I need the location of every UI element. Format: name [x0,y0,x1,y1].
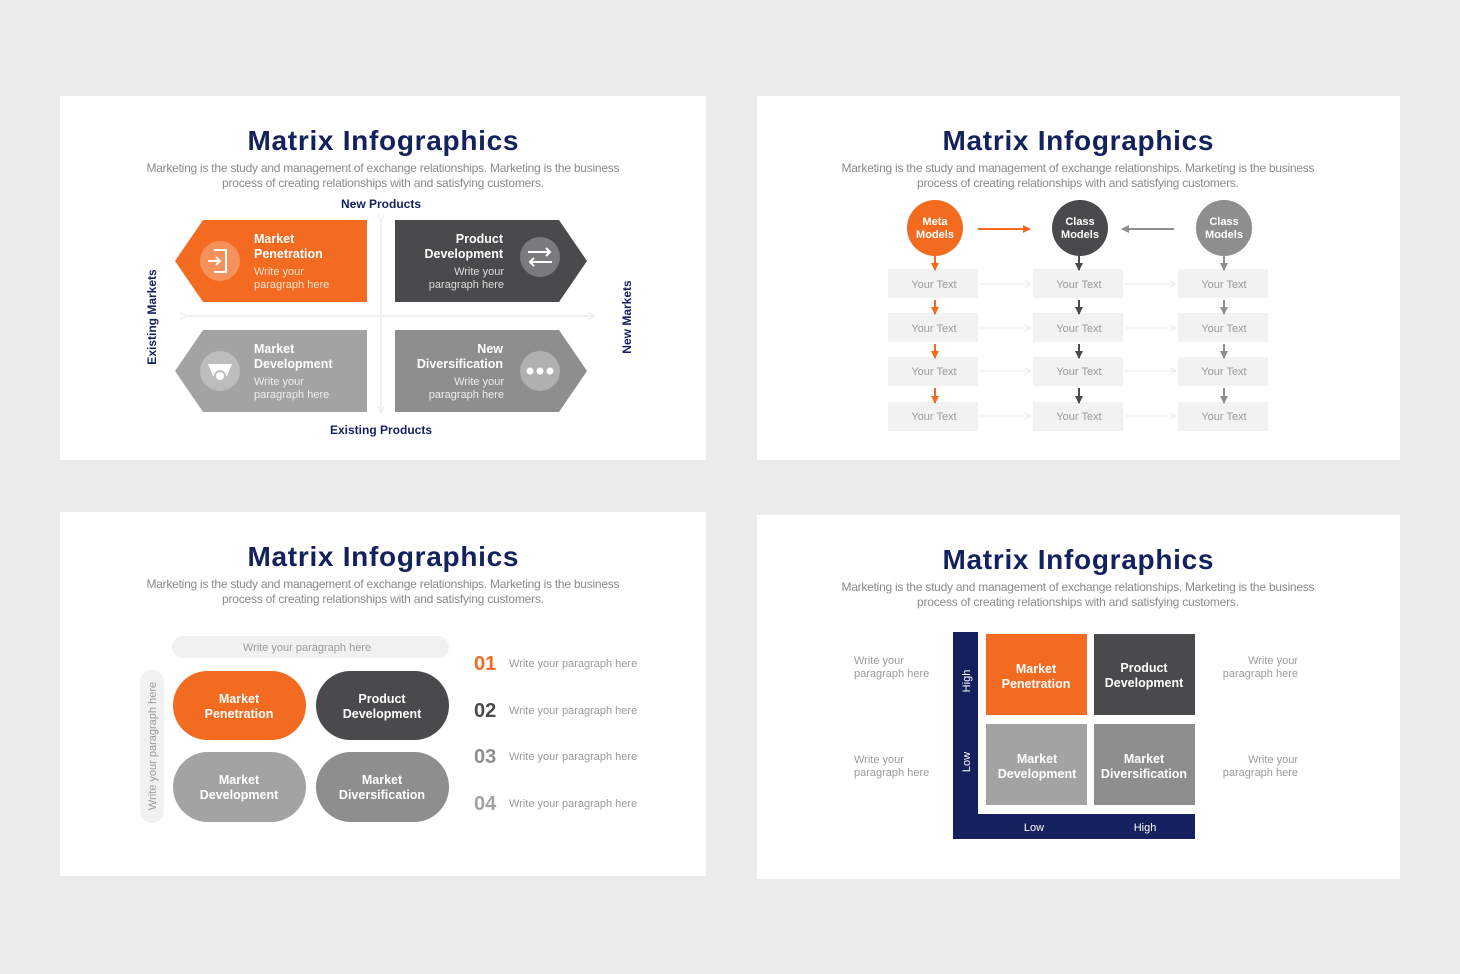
text boxes grid: Your Text [1201,279,1247,291]
card: product development: Product [456,232,504,246]
numbered list: 04 [474,793,497,815]
numbered list: 01 [474,653,496,675]
axis frame: High [961,670,973,692]
card: new diversification: paragraph here [429,389,504,401]
circle: meta models [907,200,963,256]
numbered list: Write your paragraph here [509,705,637,717]
numbered list [474,653,637,815]
pill: market penetration: Market [219,692,260,706]
circle: class models dark [1052,200,1108,256]
text boxes grid: Your Text [911,411,957,423]
card: new diversification: New [477,342,503,356]
side notes: Write your [1248,655,1298,667]
card: market penetration: Write your [254,266,304,278]
box: product development: Development [1105,676,1184,690]
subtitle [146,577,620,606]
subtitle: Marketing is the study and management of exchange relationships. Marketing is the business [146,577,620,591]
panel: model flow [757,96,1400,460]
side notes: paragraph here [854,668,929,680]
subtitle: process of creating relationships with and satisfying customers. [917,176,1239,190]
pill: market diversification: Market [362,773,403,787]
pill: market penetration: Penetration [205,707,273,721]
text boxes grid: Your Text [911,323,957,335]
subtitle: Marketing is the study and management of exchange relationships. Marketing is the business [146,161,620,175]
numbered list: Write your paragraph here [509,658,637,670]
card: product development: Write your [454,266,504,278]
subtitle: process of creating relationships with and satisfying customers. [222,176,544,190]
pill: market penetration [173,671,306,740]
subtitle [146,161,620,190]
side pill label: Write your paragraph here [147,682,159,810]
panel: square matrix [757,515,1400,879]
text boxes grid: Your Text [1056,366,1102,378]
circle: class models gray: Models [1205,229,1243,241]
pill: market development: Development [200,788,279,802]
card: new diversification: Diversification [417,357,503,371]
pill: market development: Market [219,773,260,787]
box: product development [1094,634,1195,715]
card: market penetration: Penetration [254,247,323,261]
pill: market diversification [316,752,449,822]
axis frame [953,632,1195,839]
axis label: existing markets: Existing Markets [145,269,159,365]
box: market penetration: Market [1016,662,1057,676]
text boxes grid: Your Text [911,366,957,378]
text boxes grid: Your Text [1201,411,1247,423]
card: product development [395,220,587,302]
pill: market development [173,752,306,822]
top pill label: Write your paragraph here [243,642,371,654]
text boxes grid: Your Text [1056,323,1102,335]
numbered list: Write your paragraph here [509,751,637,763]
side notes: Write your [1248,754,1298,766]
subtitle: Marketing is the study and management of exchange relationships. Marketing is the business [842,161,1314,175]
pill: product development [316,671,449,740]
panel: ansoff arrows [60,96,706,460]
subtitle: Marketing is the study and management of exchange relationships. Marketing is the business [842,580,1314,594]
title: Matrix Infographics [248,541,518,572]
title: Matrix Infographics [248,125,518,156]
card: new diversification [395,330,587,412]
side notes: Write your [854,655,904,667]
card: new diversification: Write your [454,376,504,388]
pill: market diversification: Diversification [339,788,425,802]
box: market diversification: Diversification [1101,767,1187,781]
card: market development: paragraph here [254,389,329,401]
box: market penetration: Penetration [1002,677,1070,691]
box: market diversification [1094,724,1195,805]
top pill label [172,636,449,658]
text boxes grid: Your Text [1201,366,1247,378]
card: market development: Market [254,342,295,356]
box: market development: Development [998,767,1077,781]
box: market diversification: Market [1124,752,1165,766]
subtitle: process of creating relationships with and satisfying customers. [222,592,544,606]
subtitle: process of creating relationships with and satisfying customers. [917,595,1239,609]
card: market development: Write your [254,376,304,388]
card: market development [175,330,367,412]
side notes: paragraph here [854,767,929,779]
axis frame: Low [1024,822,1044,834]
axis frame: High [1134,822,1156,834]
axis frame: Low [961,752,973,772]
panel: pill matrix [60,512,706,876]
axes [186,220,594,412]
card: market penetration: Market [254,232,295,246]
text boxes grid: Your Text [911,279,957,291]
pill: product development: Development [343,707,422,721]
card: market penetration [175,220,367,302]
circle: class models dark: Models [1061,229,1099,241]
box: market penetration [986,634,1087,715]
pill: product development: Product [358,692,406,706]
numbered list: Write your paragraph here [509,798,637,810]
subtitle [842,161,1314,190]
side pill label [140,670,164,823]
side notes: Write your [854,754,904,766]
axis label: existing products: Existing Products [330,423,432,437]
title: Matrix Infographics [942,125,1214,156]
circle: class models gray: Class [1209,216,1239,228]
box: market development: Market [1017,752,1058,766]
axis label: new markets: New Markets [620,280,634,354]
circle: class models dark: Class [1065,216,1095,228]
circle: meta models: Meta [922,216,948,228]
circle: class models gray [1196,200,1252,256]
card: market development: Development [254,357,333,371]
card: market penetration: paragraph here [254,279,329,291]
circle: meta models: Models [916,229,954,241]
side notes [854,655,1298,779]
side notes: paragraph here [1223,767,1298,779]
text boxes grid: Your Text [1201,323,1247,335]
card: product development: paragraph here [429,279,504,291]
card: product development: Development [424,247,504,261]
horizontal arrows [978,228,1174,230]
numbered list: 02 [474,700,496,722]
text boxes grid: Your Text [1056,411,1102,423]
text boxes grid: Your Text [1056,279,1102,291]
numbered list: 03 [474,746,496,768]
subtitle [842,580,1314,609]
side notes: paragraph here [1223,668,1298,680]
title: Matrix Infographics [942,544,1214,575]
text boxes grid [888,256,1268,431]
box: product development: Product [1120,661,1168,675]
box: market development [986,724,1087,805]
axis label: new products: New Products [341,197,421,211]
